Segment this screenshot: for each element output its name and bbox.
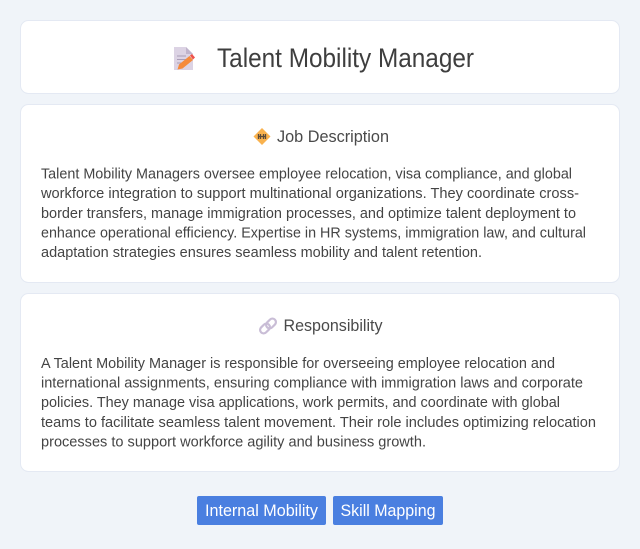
title: Talent Mobility Manager (217, 43, 474, 73)
text: job description body: enhance operational efficiency. Expertise in HR systems, immigration law, and cultural (41, 226, 586, 242)
panel: title card (20, 20, 620, 94)
panel: responsibility (20, 294, 620, 472)
tag: skill mapping: Skill Mapping (340, 502, 436, 520)
text: job description body: workforce integration to support multinational organizations. They coordinate cross- (40, 186, 579, 202)
text: responsibility body: teams to facilitate seamless talent movement. Their role includes optimizing relocation (41, 415, 596, 431)
text: responsibility body: A Talent Mobility Manager is responsible for overseeing employee relocation and (41, 356, 555, 372)
text: responsibility body (41, 356, 596, 450)
text: job description body (40, 166, 586, 261)
icon: document with pencil (174, 47, 195, 70)
tag: internal mobility: Internal Mobility (205, 502, 319, 520)
tag: skill mapping (333, 496, 443, 525)
panel: job description (20, 104, 620, 282)
text: responsibility body: processes to support workforce agility and business growth. (41, 434, 426, 450)
text: job description body: border transfers, manage immigration processes, and optimize talent deployment to (41, 206, 576, 222)
text: responsibility body: international assignments, ensuring compliance with immigration laws and corporate (41, 376, 583, 392)
tag: internal mobility (197, 496, 326, 525)
heading: job description: Job Description (277, 127, 389, 146)
heading: responsibility: Responsibility (284, 316, 383, 335)
text: job description body: Talent Mobility Managers oversee employee relocation, visa compliance, and global (41, 166, 572, 182)
icon: chain link (259, 317, 277, 335)
text: job description body: adaptation strategies ensures seamless mobility and talent retention. (41, 245, 482, 261)
text: responsibility body: policies. They manage visa applications, work permits, and coordinate with global (41, 395, 560, 411)
icon: diamond road sign (254, 128, 270, 145)
